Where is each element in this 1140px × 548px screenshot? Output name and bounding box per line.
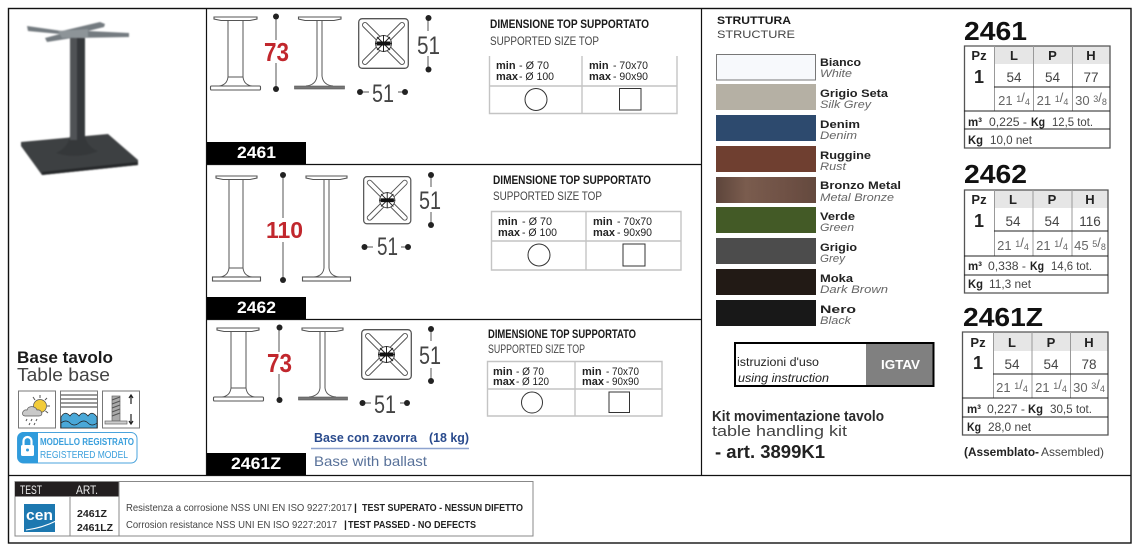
swatch: silk grey: Silk Grey xyxy=(820,99,873,111)
table: supported size: min xyxy=(496,60,516,72)
text: table handling kit: - art. 3899K1 xyxy=(715,442,825,462)
spec table: 2461: L xyxy=(1010,48,1018,63)
note: base with ballast xyxy=(311,430,469,469)
callout: using instruction: IGTAV xyxy=(881,357,920,372)
spec table: 2461: P xyxy=(1048,48,1057,63)
note: assembled xyxy=(964,445,1104,459)
spec table: 2461Z: P xyxy=(1047,335,1056,350)
spec table: 2461Z: Pz xyxy=(970,335,986,350)
table: supported size: - Ø 100 xyxy=(522,227,557,239)
spec table: 2461Z: 4 xyxy=(1100,384,1105,394)
table: supported size: max xyxy=(498,227,521,239)
swatch: green xyxy=(716,207,855,234)
note: assembled: (Assemblato- xyxy=(964,445,1039,459)
heading: supported size: SUPPORTED SIZE TOP xyxy=(493,189,602,203)
heading: structure xyxy=(717,15,795,41)
drawing: front elevation xyxy=(212,176,260,281)
swatch: rust: Ruggine xyxy=(820,150,871,162)
table: supported size: min xyxy=(582,366,602,378)
drawing: side elevation xyxy=(298,328,348,400)
spec table: 2461: / xyxy=(1021,90,1025,105)
swatch: denim xyxy=(716,115,860,142)
swatch: metal bronze xyxy=(716,177,901,204)
spec table: 2461Z: 1 xyxy=(1053,381,1058,391)
spec table: 2461: 10,0 net xyxy=(990,133,1033,147)
icon: adjustable foot xyxy=(102,391,140,428)
swatch: white xyxy=(716,54,861,80)
text: tested articles: 2461Z xyxy=(77,508,108,520)
spec table: 2461Z xyxy=(962,302,1108,435)
callout: using instruction: istruzioni d'uso xyxy=(737,357,819,369)
spec table: 2462: 8 xyxy=(1101,242,1106,252)
spec table: 2462: 21 xyxy=(997,238,1012,253)
spec table: 2461: Kg xyxy=(968,133,983,147)
panel: product xyxy=(17,22,140,463)
table: supported size: min xyxy=(589,60,609,72)
note: base with ballast: (18 kg) xyxy=(429,430,469,445)
swatch: white: White xyxy=(820,68,852,80)
dimension: width 51 xyxy=(357,80,408,108)
spec table: 2462: 116 xyxy=(1079,214,1101,229)
spec table: 2461: Kg xyxy=(1031,115,1045,129)
table: supported size: max xyxy=(496,71,519,83)
table: supported size xyxy=(492,212,681,270)
spec table: 2461: 30 xyxy=(1075,93,1090,108)
logo: CEN: cen xyxy=(26,507,53,524)
swatch: dark brown: Dark Brown xyxy=(820,284,888,296)
table: supported size: - Ø 70 xyxy=(522,216,552,228)
spec table: 2461Z: m³ xyxy=(967,402,981,416)
drawing: front elevation xyxy=(210,17,260,90)
spec table: 2461Z: 4 xyxy=(1062,384,1067,394)
text: table handling kit: Kit movimentazione tavolo xyxy=(712,408,884,425)
swatch: silk grey xyxy=(716,84,889,111)
swatch: silk grey: Grigio Seta xyxy=(820,88,889,100)
table: supported size: max xyxy=(593,227,616,239)
heading: base tavolo: Base tavolo xyxy=(17,348,113,367)
table: supported size: - 70x70 xyxy=(617,216,652,228)
spec table: 2461: / xyxy=(1098,90,1102,105)
spec table: 2462: / xyxy=(1059,235,1063,250)
spec table: 2461: 0,225 - xyxy=(989,115,1027,129)
drawing: front elevation xyxy=(214,328,264,401)
spec table: 2461: 12,5 tot. xyxy=(1052,115,1093,129)
text: test result xyxy=(126,502,523,531)
spec table: 2461Z: Kg xyxy=(1028,402,1043,416)
heading: structure: STRUCTURE xyxy=(717,29,795,41)
dimension: depth 51 xyxy=(419,172,441,228)
dimension: depth 51: 51 xyxy=(419,342,441,370)
dimension: height 73 xyxy=(267,324,292,403)
heading: supported size xyxy=(490,17,649,48)
swatch: metal bronze: Metal Bronze xyxy=(820,192,894,204)
spec table: 2461Z: / xyxy=(1058,377,1062,392)
spec table: 2462: 4 xyxy=(1063,242,1068,252)
spec table: 2461Z: 0,227 - xyxy=(987,402,1025,416)
dimension: height 73: 73 xyxy=(264,39,289,67)
spec table: 2461Z: 30 xyxy=(1073,380,1088,395)
spec table: 2462: / xyxy=(1097,235,1101,250)
spec table: 2462: H xyxy=(1085,192,1095,207)
table: supported size xyxy=(488,362,662,416)
test table header: TEST xyxy=(20,483,42,497)
heading: structure: STRUTTURA xyxy=(717,15,791,27)
dimension: depth 51: 51 xyxy=(417,32,440,60)
callout: using instruction: using instruction xyxy=(738,373,829,385)
swatch: black xyxy=(716,300,856,327)
dimension: width 51: 51 xyxy=(372,80,394,108)
spec table: 2461Z: 4 xyxy=(1023,384,1028,394)
text: test result: TEST SUPERATO - NESSUN DIFETTO xyxy=(362,502,523,514)
spec table: 2462: 54 xyxy=(1044,214,1060,229)
spec table: 2461Z: / xyxy=(1019,377,1023,392)
heading: supported size xyxy=(488,329,636,356)
dimension: height 73: 73 xyxy=(267,350,292,378)
spec table: 2461: H xyxy=(1086,48,1096,63)
spec table: 2461: 8 xyxy=(1102,97,1107,107)
drawing: side elevation xyxy=(294,17,344,89)
dimension: width 51: 51 xyxy=(374,391,396,419)
spec table: 2462: 2462 xyxy=(964,159,1027,189)
text: table handling kit: table handling kit xyxy=(712,423,848,440)
spec table: 2462: / xyxy=(1020,235,1024,250)
table: supported size: max xyxy=(589,71,612,83)
label: 2462: 2462 xyxy=(237,298,276,317)
table: supported size: min xyxy=(498,216,518,228)
swatch: green: Green xyxy=(820,222,854,234)
spec table: 2461: 1 xyxy=(1055,94,1060,104)
text: test result: | xyxy=(354,502,357,514)
table: supported size: - Ø 100 xyxy=(519,71,554,83)
label: 2461: 2461 xyxy=(237,143,276,162)
dimension: width 51 xyxy=(360,391,410,419)
spec table: 2462: 54 xyxy=(1005,214,1021,229)
spec table: 2462: Kg xyxy=(1030,259,1044,273)
badge: registered model xyxy=(18,432,137,463)
heading: supported size: DIMENSIONE TOP SUPPORTATO xyxy=(493,173,651,187)
heading: supported size: SUPPORTED SIZE TOP xyxy=(490,34,599,48)
heading: supported size: DIMENSIONE TOP SUPPORTATO xyxy=(488,329,636,341)
spec table: 2461Z: 3 xyxy=(1091,381,1096,391)
spec table: 2462: m³ xyxy=(968,259,982,273)
spec table: 2461: 1 xyxy=(974,67,984,87)
spec table: 2462: 21 xyxy=(1036,238,1051,253)
note: base with ballast: Base with ballast xyxy=(314,453,427,469)
table: supported size: - Ø 70 xyxy=(519,60,549,72)
icon: water and salt resistance xyxy=(60,391,98,428)
dimension: depth 51 xyxy=(419,326,441,384)
spec table: 2461Z: 1 xyxy=(1014,381,1019,391)
text: test result: Corrosion resistance NSS UNI EN ISO 9227:2017 xyxy=(126,519,337,531)
spec table: 2462: 1 xyxy=(1054,239,1059,249)
text: test result: TEST PASSED - NO DEFECTS xyxy=(348,519,476,531)
heading: supported size: SUPPORTED SIZE TOP xyxy=(488,344,585,356)
spec table: 2461: 54 xyxy=(1006,70,1022,85)
table: supported size xyxy=(490,56,677,114)
table: supported size: min xyxy=(593,216,613,228)
heading: supported size xyxy=(493,173,651,203)
spec table: 2461: 3 xyxy=(1093,94,1098,104)
spec table: 2461 xyxy=(964,16,1110,148)
label: 2461Z: 2461Z xyxy=(231,454,281,473)
swatch: metal bronze: Bronzo Metal xyxy=(820,180,901,192)
swatch: white: Bianco xyxy=(820,57,861,69)
table: supported size: - 70x70 xyxy=(606,366,639,378)
table: supported size: max xyxy=(493,376,516,388)
text: test result: | xyxy=(344,519,347,531)
spec table: 2461: 54 xyxy=(1045,70,1060,85)
spec table: 2461: 21 xyxy=(1037,93,1051,108)
spec table: 2461Z: 30,5 tot. xyxy=(1050,402,1092,416)
spec table: 2461Z: 2461Z xyxy=(963,302,1043,332)
panel: specifications xyxy=(962,16,1110,459)
spec table: 2462: 14,6 tot. xyxy=(1051,259,1092,273)
text: table handling kit xyxy=(712,408,884,462)
spec table: 2462: P xyxy=(1048,192,1057,207)
note: assembled: Assembled) xyxy=(1041,445,1104,459)
spec table: 2461: 2461 xyxy=(964,16,1027,46)
spec table: 2461Z: 1 xyxy=(973,353,983,373)
dimension: height 73 xyxy=(264,14,289,92)
spec table: 2462: 0,338 - xyxy=(988,259,1026,273)
note: base with ballast: Base con zavorra xyxy=(314,430,418,445)
spec table: 2461: 4 xyxy=(1063,97,1068,107)
label: 2461Z xyxy=(207,453,306,475)
swatch: rust xyxy=(716,146,871,173)
drawing: side elevation xyxy=(302,176,350,281)
table: supported size: max xyxy=(582,376,605,388)
dimension: height 110: 110 xyxy=(266,217,303,243)
spec table: 2462: 1 xyxy=(974,211,984,231)
dimension: height 110 xyxy=(266,172,303,283)
swatch: denim: Denim xyxy=(820,130,857,142)
heading: base tavolo xyxy=(17,348,113,385)
label: 2461 xyxy=(207,142,306,164)
dimension: depth 51 xyxy=(417,15,440,72)
heading: base tavolo: Table base xyxy=(17,365,110,385)
spec table: 2461Z: H xyxy=(1084,335,1094,350)
spec table: 2461: 21 xyxy=(998,93,1013,108)
dimension: width 51 xyxy=(362,233,411,261)
panel: model 2461 xyxy=(207,14,677,164)
table: supported size: - Ø 70 xyxy=(516,366,544,378)
spec table: 2461Z: 21 xyxy=(996,380,1011,395)
spec table: 2461: / xyxy=(1060,90,1063,105)
spec table: 2462: 4 xyxy=(1024,242,1029,252)
spec table: 2461Z: 78 xyxy=(1081,357,1097,372)
table: supported size: - Ø 120 xyxy=(516,376,549,388)
spec table: 2461: 77 xyxy=(1083,70,1099,85)
swatch: black: Nero xyxy=(820,304,856,316)
swatch: grey: Grigio xyxy=(820,242,857,254)
spec table: 2461Z: L xyxy=(1008,335,1016,350)
test table header xyxy=(15,482,119,536)
spec table: 2462: L xyxy=(1009,192,1017,207)
dimension: depth 51: 51 xyxy=(419,187,441,215)
heading: supported size: DIMENSIONE TOP SUPPORTATO xyxy=(490,17,649,31)
panel: corrosion test xyxy=(15,482,533,536)
table: supported size: - 70x70 xyxy=(613,60,648,72)
spec table: 2461: 4 xyxy=(1025,97,1030,107)
swatch: grey: Grey xyxy=(820,253,847,265)
label: 2462 xyxy=(207,297,306,319)
panel: model 2461Z xyxy=(207,324,662,475)
dimension: width 51: 51 xyxy=(377,233,398,261)
spec table: 2461Z: / xyxy=(1096,377,1100,392)
spec table: 2461Z: 21 xyxy=(1035,380,1050,395)
test table header: ART. xyxy=(76,483,98,497)
spec table: 2461Z: 54 xyxy=(1004,357,1020,372)
icon: weather resistance xyxy=(18,391,56,428)
swatch: black: Black xyxy=(820,315,852,327)
badge: registered model: MODELLO REGISTRATO xyxy=(40,436,134,448)
table: supported size: - 90x90 xyxy=(617,227,652,239)
spec table: 2462: 5 xyxy=(1092,239,1097,249)
spec table: 2462: Kg xyxy=(968,277,983,291)
spec table: 2461Z: Kg xyxy=(967,420,981,434)
spec table: 2462: 45 xyxy=(1074,238,1089,253)
spec table: 2462: 1 xyxy=(1015,239,1020,249)
text: test result: Resistenza a corrosione NSS UNI EN ISO 9227:2017 xyxy=(126,502,352,514)
swatch: dark brown xyxy=(716,269,888,296)
spec table: 2462: 11,3 net xyxy=(989,277,1032,291)
swatch: green: Verde xyxy=(820,211,855,223)
swatch: grey xyxy=(716,238,857,265)
text: tested articles xyxy=(77,508,114,534)
icon: plate from above xyxy=(364,177,411,224)
badge: registered model: REGISTERED MODEL xyxy=(40,449,128,461)
table: supported size: - 90x90 xyxy=(606,376,639,388)
spec table: 2461: Pz xyxy=(971,48,987,63)
spec table: 2461: m³ xyxy=(968,115,982,129)
spec table: 2461Z: 28,0 net xyxy=(988,420,1032,434)
swatch: rust: Rust xyxy=(820,161,847,173)
icon: plate from above xyxy=(359,19,408,68)
panel: structure colours xyxy=(712,15,934,462)
panel: model 2462 xyxy=(207,172,681,319)
product photo: table base xyxy=(21,22,138,175)
logo: CEN xyxy=(24,504,56,532)
spec table: 2462: Pz xyxy=(971,192,987,207)
spec table: 2462 xyxy=(964,159,1108,293)
swatch: denim: Denim xyxy=(820,119,860,131)
spec table: 2461Z: 54 xyxy=(1043,357,1059,372)
callout: using instruction xyxy=(735,343,934,386)
spec table: 2461: 1 xyxy=(1016,94,1021,104)
table: supported size: - 90x90 xyxy=(613,71,648,83)
table: supported size: min xyxy=(493,366,513,378)
swatch: dark brown: Moka xyxy=(820,273,854,285)
text: tested articles: 2461LZ xyxy=(77,522,114,534)
icon: plate from above xyxy=(362,330,411,379)
